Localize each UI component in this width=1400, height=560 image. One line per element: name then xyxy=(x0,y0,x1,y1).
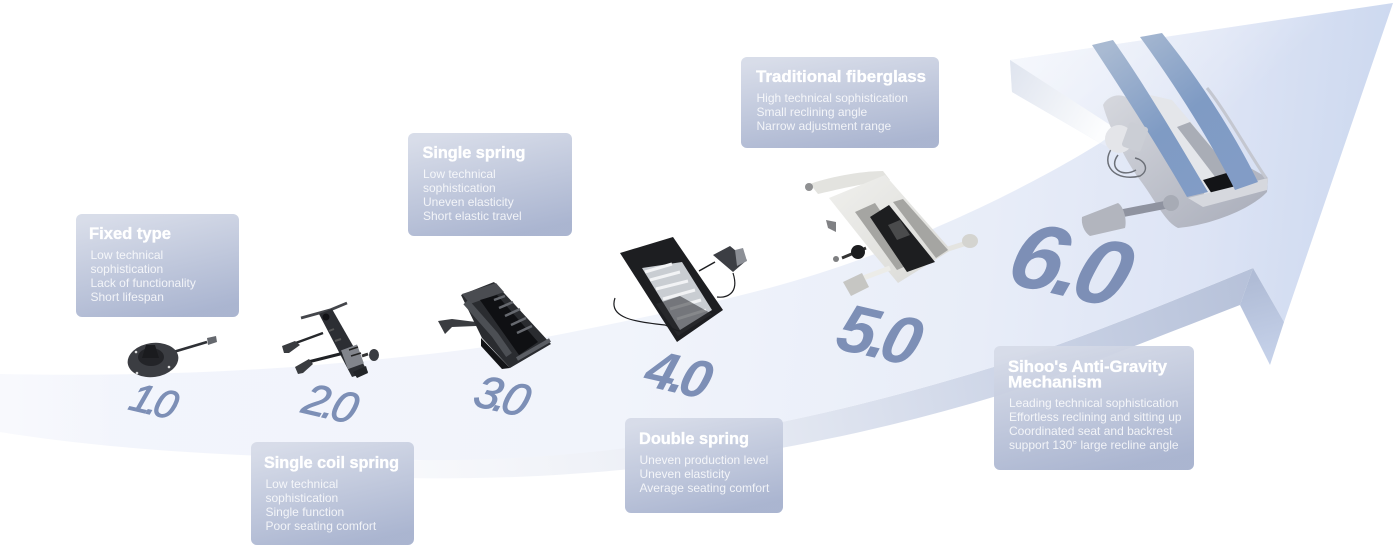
number 3.0: 3.0 xyxy=(468,365,538,427)
details: sophistication xyxy=(90,262,163,276)
details: Coordinated seat and backrest xyxy=(1009,424,1173,438)
icon: mechanism 2.0 coil spring xyxy=(282,303,379,378)
details: Narrow adjustment range xyxy=(756,119,892,133)
panel: Single spring xyxy=(408,133,572,236)
details: Low technical xyxy=(90,248,163,262)
heading: Sihoo's Anti-Gravity xyxy=(1008,358,1168,376)
heading: Single spring xyxy=(422,144,526,162)
icon: mechanism 3.0 single spring xyxy=(438,282,551,369)
icon: mechanism 5.0 fiberglass xyxy=(805,171,978,296)
panel: Fixed type xyxy=(76,214,239,317)
details: Short lifespan xyxy=(90,290,164,304)
details: Effortless reclining and sitting up xyxy=(1009,410,1182,424)
details: Leading technical sophistication xyxy=(1009,396,1178,410)
details: Low technical xyxy=(266,477,338,491)
number 1.0: 1.0 xyxy=(124,376,184,428)
details: Uneven production level xyxy=(640,453,768,467)
details: Poor seating comfort xyxy=(266,519,377,533)
number 6.0: 6.0 xyxy=(996,201,1146,328)
icon: mechanism 6.0 anti-gravity xyxy=(1082,33,1268,236)
icon: mechanism 1.0 fixed plate xyxy=(125,336,217,380)
number 4.0: 4.0 xyxy=(638,339,719,411)
details: High technical sophistication xyxy=(756,91,908,105)
details: sophistication xyxy=(266,491,338,505)
details: Low technical xyxy=(423,167,496,181)
details: Uneven elasticity xyxy=(423,195,514,209)
details: Average seating comfort xyxy=(640,481,770,495)
details: Lack of functionality xyxy=(90,276,196,290)
panel: Double spring xyxy=(625,418,783,513)
heading: Traditional fiberglass xyxy=(756,68,926,86)
details: sophistication xyxy=(423,181,496,195)
details: Short elastic travel xyxy=(423,209,522,223)
details: support 130° large recline angle xyxy=(1009,438,1179,452)
number 2.0: 2.0 xyxy=(296,375,365,434)
panel: Sihoo's Anti-Gravity Mechanism xyxy=(994,346,1194,470)
heading: Single coil spring xyxy=(264,454,399,472)
number 5.0: 5.0 xyxy=(829,290,931,381)
heading: Fixed type xyxy=(89,225,171,243)
panel: Traditional fiberglass xyxy=(741,57,939,148)
details: Small reclining angle xyxy=(756,105,868,119)
heading: Mechanism xyxy=(1008,374,1102,392)
icon: mechanism 4.0 double spring xyxy=(614,237,747,342)
details: Single function xyxy=(266,505,344,519)
heading: Double spring xyxy=(639,430,749,448)
details: Uneven elasticity xyxy=(640,467,730,481)
panel: Single coil spring xyxy=(251,442,414,545)
